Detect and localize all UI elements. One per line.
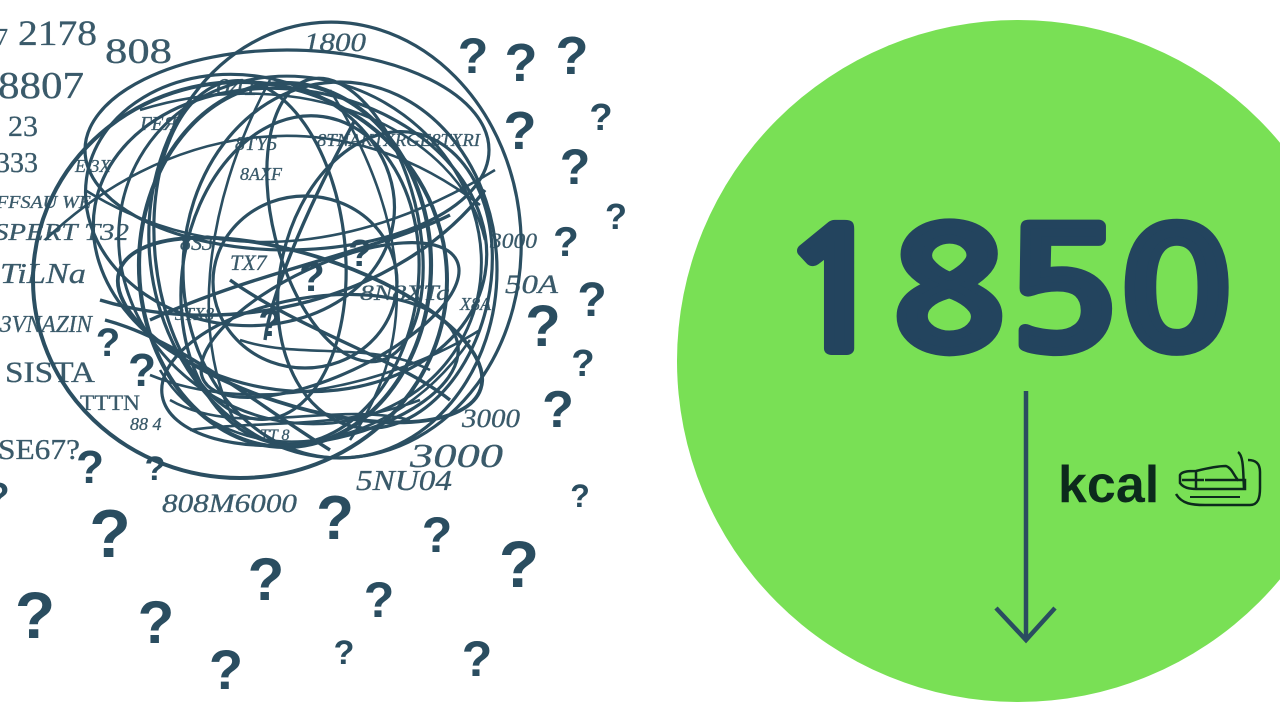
arrow pointing down (996, 391, 1055, 640)
panel: scrambled numbers behind the scribble: 3000 (461, 404, 520, 433)
panel: scrambled numbers behind the scribble: 808 (105, 31, 172, 71)
panel: scrambled numbers behind the scribble: ГЕЯ (139, 113, 179, 135)
panel: scrambled numbers behind the scribble: E 3X (74, 156, 111, 176)
scattered question marks (0, 26, 627, 701)
scattered question marks: ? (209, 638, 243, 701)
green circle (677, 20, 1280, 702)
icon: kcal device sketch (1176, 452, 1260, 505)
scattered question marks: ? (560, 139, 590, 195)
scattered question marks: ? (248, 546, 284, 613)
panel: scrambled numbers behind the scribble: TX7 (230, 250, 268, 275)
panel: scrambled numbers behind the scribble: 1800 (304, 28, 366, 57)
question marks inside the scribble: ? (96, 321, 120, 365)
panel: scrambled numbers behind the scribble: 041 (216, 75, 258, 101)
scattered question marks: ? (504, 33, 538, 93)
scattered question marks: ? (364, 572, 394, 628)
question marks inside the scribble: ? (258, 303, 282, 345)
panel: scrambled numbers behind the scribble: 3VNAZIN (0, 312, 94, 338)
scattered question marks: ? (89, 496, 131, 572)
scattered question marks: ? (15, 578, 55, 652)
scattered question marks: ? (525, 294, 561, 359)
scattered question marks: ? (138, 589, 174, 656)
scattered question marks: ? (577, 274, 607, 327)
scattered question marks: ? (76, 441, 104, 493)
scattered question marks: ? (499, 527, 539, 601)
panel: scrambled numbers behind the scribble: 3000 (409, 438, 503, 475)
question marks inside the scribble: ? (145, 450, 165, 488)
panel: scrambled numbers behind the scribble: 808M6000 (162, 489, 297, 518)
scattered question marks: ? (316, 484, 354, 553)
scribble of tangled loops (33, 10, 545, 490)
panel: scrambled numbers behind the scribble: 5NU04 (356, 466, 452, 497)
panel: scrambled numbers behind the scribble: 23 (8, 110, 38, 143)
scattered question marks: ? (570, 478, 590, 514)
scattered question marks: ? (556, 26, 588, 86)
panel: scrambled numbers behind the scribble: 3000 (489, 228, 537, 253)
scattered question marks: ? (422, 507, 452, 563)
panel: scrambled numbers behind the scribble (0, 13, 558, 518)
scattered question marks: ? (458, 28, 488, 84)
panel: scrambled numbers behind the scribble: 8AXF (240, 164, 283, 184)
unit label kcal: kcal (1058, 456, 1159, 514)
panel: scrambled numbers behind the scribble: 8TNAKTXRGE8TXRI (317, 130, 481, 150)
question marks inside the scribble: ? (348, 233, 372, 275)
scattered question marks: ? (504, 101, 536, 161)
panel: scrambled numbers behind the scribble: SISTA (5, 356, 95, 389)
scattered question marks: ? (571, 343, 595, 385)
panel: scrambled numbers behind the scribble: 8N8XTa (360, 280, 450, 305)
panel: scrambled numbers behind the scribble: 8TY5 (235, 133, 277, 155)
scattered question marks: ? (589, 97, 613, 139)
panel: scrambled numbers behind the scribble: TT 8 (260, 427, 290, 444)
panel: scrambled numbers behind the scribble: 2178 (18, 13, 97, 53)
scattered question marks: ? (542, 381, 574, 439)
scattered question marks: ? (553, 218, 579, 265)
question marks inside the scribble: ? (299, 253, 325, 300)
question marks inside the scribble: ? (128, 344, 156, 396)
panel: scrambled numbers behind the scribble: 8807 (0, 65, 84, 107)
panel: scrambled numbers behind the scribble: 3TX8 (174, 304, 214, 324)
panel: scrambled numbers behind the scribble: 8S3 (180, 230, 213, 255)
scattered question marks: ? (334, 634, 354, 672)
question marks inside the scribble (96, 233, 372, 488)
panel: scrambled numbers behind the scribble: 50A (505, 270, 558, 299)
panel: scrambled numbers behind the scribble: 88 4 (130, 414, 162, 434)
scattered question marks: ? (462, 631, 492, 687)
panel: scrambled numbers behind the scribble: TTTN (80, 390, 140, 415)
panel: scrambled numbers behind the scribble: X8A (459, 294, 492, 314)
panel: scrambled numbers behind the scribble: TiLNa (0, 259, 86, 290)
panel: scrambled numbers behind the scribble: SE67? (0, 435, 80, 466)
scattered question marks: ? (605, 196, 627, 237)
number 1850: 1850 (778, 210, 1233, 375)
